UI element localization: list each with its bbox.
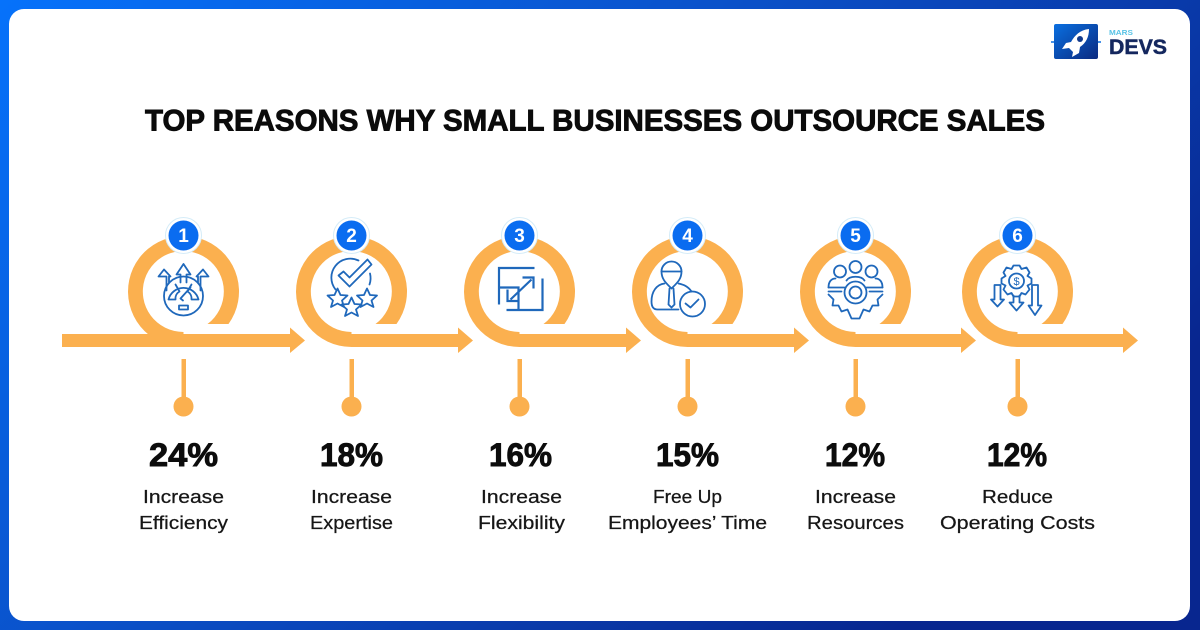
- step 6: Reduce Operating Costs: [940, 218, 1138, 533]
- arrow 5: [856, 328, 976, 353]
- label Reduce Operating Costs: Reduce: [982, 486, 1053, 507]
- label Increase Flexibility: Increase: [481, 486, 562, 507]
- icon: speedometer with arrows: [158, 264, 208, 316]
- number badge 1: [166, 218, 202, 254]
- icon: dollar gear with down arrows: [991, 266, 1042, 315]
- arrow 1: [62, 328, 305, 353]
- step 4: Free Up Employees' Time: [608, 218, 809, 533]
- logo icon: rocket: [1051, 24, 1101, 59]
- number badge 5: 5: [850, 226, 861, 247]
- value 12%: 12%: [987, 437, 1047, 473]
- logo wordmark DEVS: DEVS: [1109, 36, 1167, 59]
- step 3: Increase Flexibility: [464, 218, 641, 533]
- label Reduce Operating Costs: Operating Costs: [940, 512, 1095, 533]
- number badge 3: [502, 218, 538, 254]
- ring 4: [632, 236, 743, 347]
- number badge 6: 6: [1012, 226, 1023, 247]
- logo wordmark MARS: MARS: [1109, 30, 1133, 37]
- stem and dot 5: [846, 359, 866, 416]
- ring 5: [800, 236, 911, 347]
- stem and dot 2: [342, 359, 362, 416]
- stem and dot 4: [678, 359, 698, 416]
- label Increase Efficiency: Increase: [143, 486, 224, 507]
- step 2: Increase Expertise: [296, 218, 473, 533]
- icon: scaling square: [499, 268, 542, 310]
- number badge 4: [670, 218, 706, 254]
- step 1: Increase Efficiency: [62, 218, 305, 533]
- number badge 4: 4: [682, 226, 693, 247]
- stem and dot 6: [1008, 359, 1028, 416]
- label Increase Efficiency: Efficiency: [139, 512, 229, 533]
- arrow 4: [688, 328, 809, 353]
- value 12%: 12%: [825, 437, 885, 473]
- number badge 3: 3: [514, 226, 525, 247]
- value 16%: 16%: [489, 437, 552, 473]
- title: TOP REASONS WHY SMALL BUSINESSES OUTSOURCE SALES: [145, 104, 1045, 138]
- step 5: Increase Resources: [800, 218, 976, 533]
- number badge 5: [838, 218, 874, 254]
- icon: team and gear: [828, 261, 882, 318]
- label Free Up Employees' Time: Free Up: [653, 486, 722, 507]
- label Increase Expertise: Increase: [311, 486, 392, 507]
- arrow 6: [1018, 328, 1138, 353]
- number badge 1: 1: [178, 226, 189, 247]
- label Increase Expertise: Expertise: [310, 512, 393, 533]
- number badge 2: [334, 218, 370, 254]
- icon: check mark with stars: [328, 259, 377, 316]
- label Increase Resources: Increase: [815, 486, 896, 507]
- logo: Mars Devs: [1051, 24, 1167, 59]
- ring 6: [962, 236, 1073, 347]
- stem and dot 1: [174, 359, 194, 416]
- stem and dot 3: [510, 359, 530, 416]
- number badge 6: [1000, 218, 1036, 254]
- icon: dollar gear with down arrows: $: [1013, 276, 1020, 288]
- arrow 2: [352, 328, 473, 353]
- ring 1: [128, 236, 239, 347]
- label Increase Resources: Resources: [807, 512, 904, 533]
- arrow 3: [520, 328, 641, 353]
- label Increase Flexibility: Flexibility: [478, 512, 566, 533]
- ring 2: [296, 236, 407, 347]
- value 15%: 15%: [656, 437, 719, 473]
- label Free Up Employees' Time: Employees’ Time: [608, 512, 767, 533]
- number badge 2: 2: [346, 226, 357, 247]
- value 24%: 24%: [149, 437, 218, 473]
- icon: employee with clock: [652, 262, 705, 316]
- ring 3: [464, 236, 575, 347]
- value 18%: 18%: [320, 437, 383, 473]
